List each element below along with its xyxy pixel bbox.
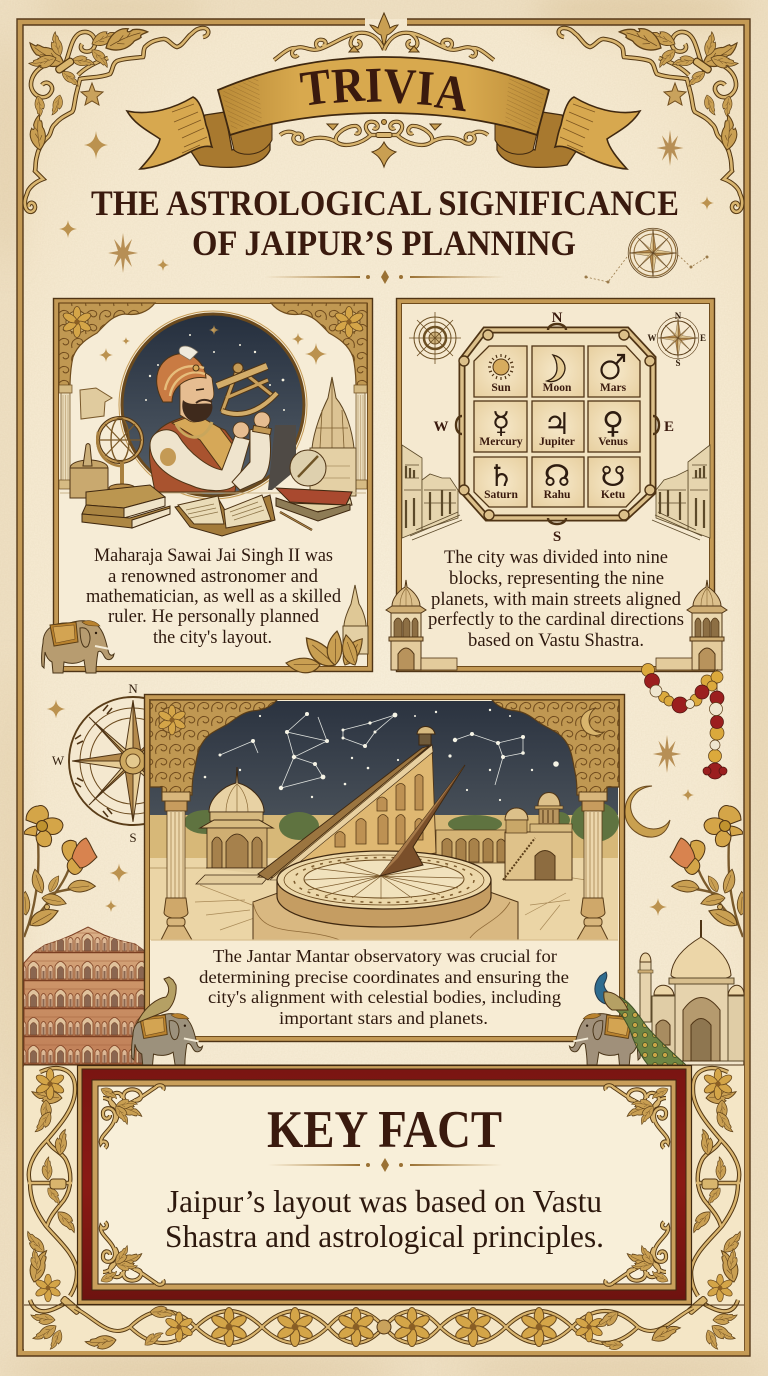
planetary grid: ♀ [602,406,624,441]
elephant with peacock, left [132,977,203,1065]
banner right tail [497,97,640,169]
cell: Saturn [474,457,527,507]
planetary grid: ☋ [601,460,625,493]
panel 1 text [86,546,342,648]
astronomer figure [149,346,271,492]
map scroll [80,388,112,419]
stacked books left [82,485,170,528]
red band [82,1069,686,1300]
banner left tail [127,97,270,169]
main heading [91,183,679,263]
planetary grid: ♄ [488,459,514,494]
arch left [150,700,277,795]
banner label: TRIVIA: TRIVIA [298,58,471,123]
planetary grid [456,324,659,524]
key corners [100,1084,669,1286]
samrat yantra [258,726,436,880]
cardinal labels: N [552,310,563,326]
panel 2 text: based on Vastu Shastra. [468,630,644,651]
elephant, panel 1 [42,621,114,673]
panel 3 outlines [144,694,624,1042]
planetary grid: Moon [543,382,572,394]
main heading: OF JAIPUR’S PLANNING [192,223,576,263]
panel 3 text: determining precise coordinates and ensuring the [199,967,569,987]
icon: moon [547,355,565,382]
floral spray right [670,806,748,937]
icon: compass top right: S [675,358,681,368]
panel 3 text: The Jantar Mantar observatory was crucial for [213,946,557,966]
Taj Mahal [638,920,744,1061]
cream field [98,1086,671,1284]
top crest ornament [274,13,494,60]
panel 2 text: perfectly to the cardinal directions [428,609,684,630]
panel 2 text: planets, with main streets aligned [431,589,681,610]
cell: Mars [588,346,640,397]
panel 1 text: Maharaja Sawai Jai Singh II was [94,546,333,566]
arch left [59,303,155,489]
planetary grid: Mercury [479,436,523,448]
compass rose left: N [128,681,138,696]
gate tower right [656,580,727,670]
ornament: right vine [687,1068,744,1351]
heading divider [265,270,505,284]
sextant [217,363,277,414]
key fact frame [24,1065,744,1353]
cardinal labels: W [434,419,448,435]
corner ornament: top left [25,26,208,212]
panel: Maharaja Sawai Jai Singh II [42,298,372,675]
caption background [151,940,618,1035]
cardinal labels: E [664,419,674,435]
panel: Jantar Mantar observatory [144,694,624,1042]
banner ribbon [127,57,640,169]
cell: Ketu [588,457,640,507]
temple illustration [310,377,356,496]
key fact statement: Jaipur’s layout was based on Vastu [167,1183,602,1219]
table shadow line [60,492,366,494]
corner ornament: top right [559,26,742,212]
ornament: bottom interlace band [24,1303,744,1353]
icon: sun [488,354,514,380]
key fact heading: KEY FACT [267,1101,502,1159]
cardinal labels [434,310,674,545]
banner main band [218,57,549,154]
planetary grid: Rahu [544,489,571,501]
icon: compass top right [648,311,706,368]
Hawa Mahal palace [24,927,146,1066]
planetary grid: Venus [598,436,628,448]
planetary grid: Jupiter [539,436,575,448]
cardinal labels: S [553,529,561,545]
constellations and stars [204,709,573,801]
compass rose left [52,681,197,845]
icon: crescent moon [625,786,670,837]
icon: compass top right: W [648,333,656,343]
panel 1 text: a renowned astronomer and [108,567,319,587]
panel 2 text: blocks, representing the nine [449,568,664,589]
planetary grid: Saturn [484,489,519,501]
panel 2 text: The city was divided into nine [444,547,668,568]
arch right [492,700,619,795]
planetary grid: ☿ [492,406,510,441]
under-banner ornament [280,120,488,167]
panel 2 text [428,547,684,651]
arcade right [436,830,506,863]
street scene right [652,445,710,540]
compass rose left: W [52,753,65,768]
horizon wall and ground [150,815,618,940]
sundial disc [277,851,491,927]
icon: compass and constellation, top right [584,228,708,284]
stacked books right with globe [276,450,352,521]
sparkles near title [59,130,714,273]
inner gold rim [92,1080,676,1290]
icon: compass top right: N [675,311,682,321]
outer gold rim [78,1066,692,1304]
cell: Jupiter [532,401,584,452]
panel 1 text: mathematician, as well as a skilled [86,587,342,607]
domed gatehouse right [503,792,572,880]
icon: compass top right: E [700,333,706,343]
cell: Venus [588,401,640,452]
panel 3 text [199,946,569,1028]
stone pedestal [253,885,518,940]
panel 3 text: important stars and planets. [279,1008,488,1028]
gnomon [380,765,465,876]
compass rose left: S [129,830,137,845]
floral spray left [19,806,97,937]
planetary grid: Ketu [601,489,626,501]
key fact statement [165,1183,604,1254]
elephant with peacock, right [569,972,686,1065]
trees [184,802,619,842]
panel: nine blocks city plan [386,298,727,672]
sparkles right margin [46,700,694,916]
street scene left [402,445,462,540]
open book [175,495,275,536]
temple and lotus foliage, bottom right [285,585,368,675]
icon: dial top left [409,312,461,364]
panel 1 text: ruler. He personally planned [108,607,320,627]
cell: Rahu [532,457,584,507]
ornament: left vine [24,1068,81,1351]
main heading: THE ASTROLOGICAL SIGNIFICANCE [91,183,679,223]
panel 1 text: the city's layout. [153,628,272,648]
arch right [271,303,367,489]
icon: mars [602,355,624,378]
planetary grid: Mars [600,382,627,394]
key fact statement: Shastra and astrological principles. [165,1218,604,1254]
key fact divider [268,1158,502,1172]
vessel [70,444,108,498]
column right [577,792,608,940]
sky medallion [119,311,307,499]
pen [280,512,312,530]
cell: Sun [474,346,527,397]
night sky [150,701,618,836]
scattered stars around medallion [99,333,327,365]
column left [161,792,192,940]
planetary grid: Sun [491,382,511,394]
panel 3 text: city's alignment with celestial bodies, including [208,987,561,1007]
armillary sphere [97,418,142,492]
gate tower left [386,580,457,670]
cell: Mercury [474,401,527,452]
pavilion left [196,767,273,884]
marigold garland [642,664,727,779]
cell: Moon [532,346,584,397]
planetary grid: ☊ [544,459,570,494]
planetary grid: ♃ [544,407,570,442]
